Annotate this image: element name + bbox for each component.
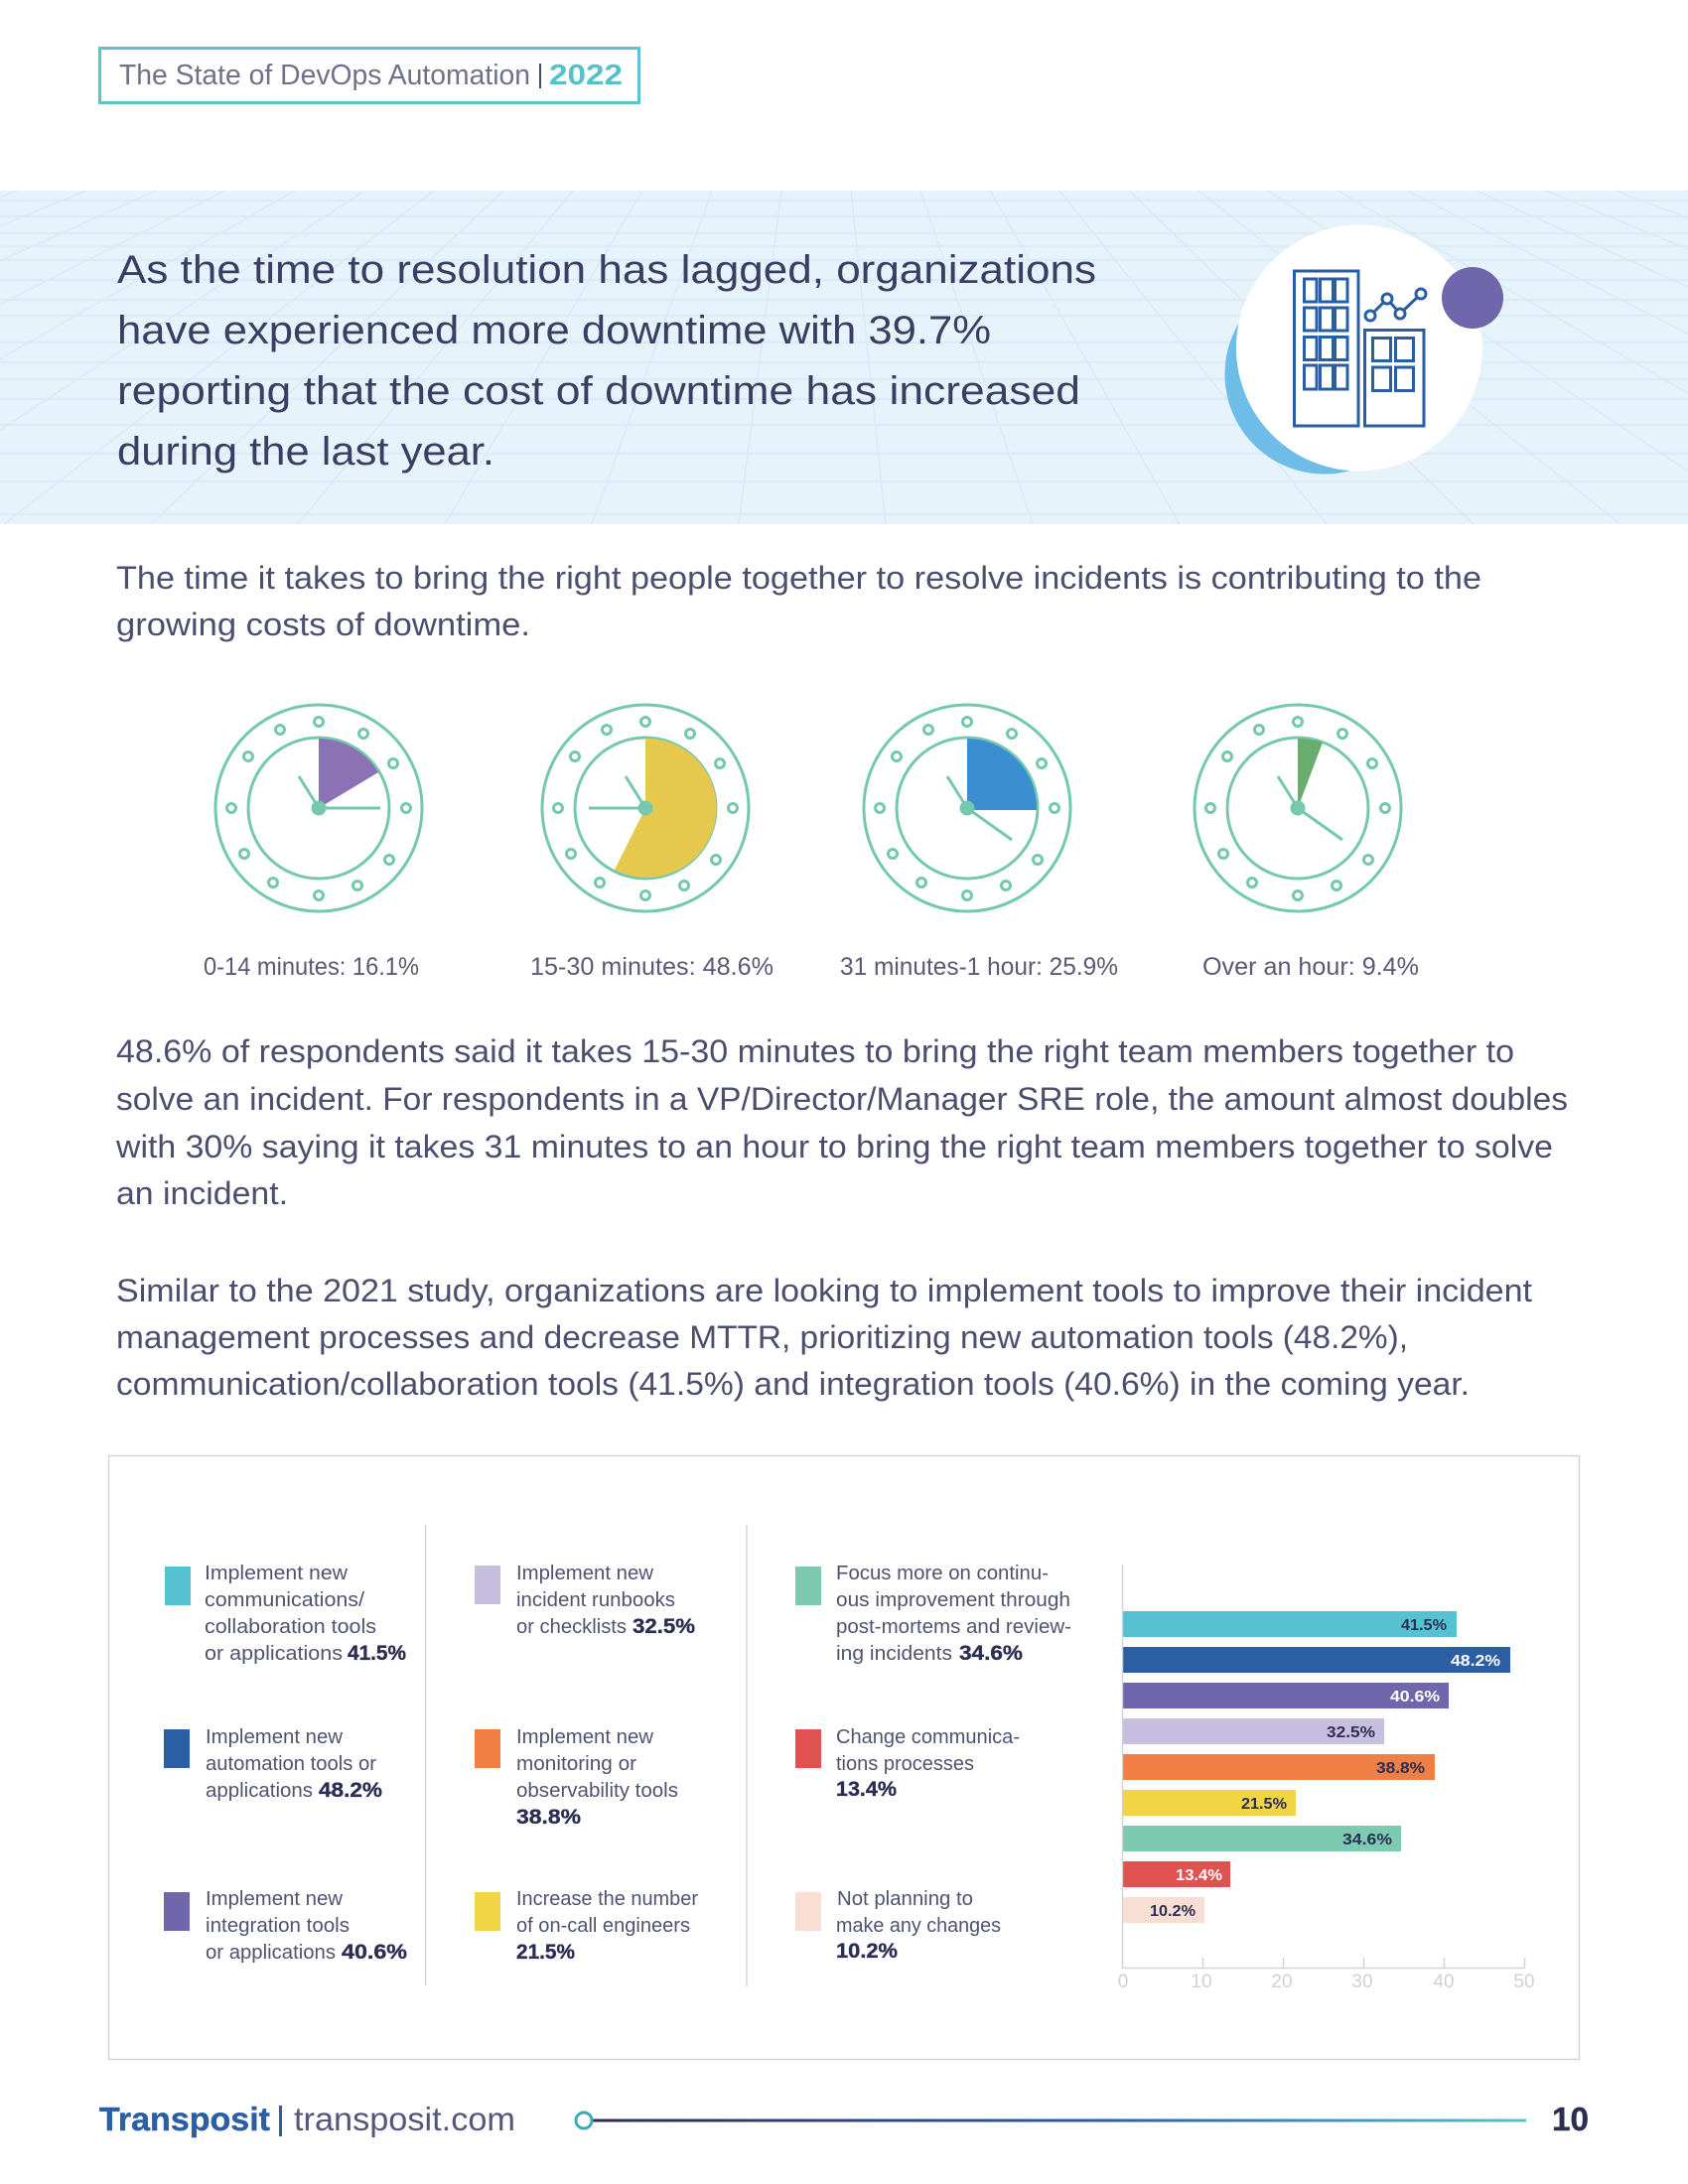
legend: incident runbooks: Implement new <box>516 1563 654 1584</box>
bar chart: 10 <box>1191 1972 1212 1992</box>
intro paragraph <box>116 560 1481 642</box>
clock label: 15-30 minutes: 15-30 minutes: 48.6% <box>530 953 774 981</box>
page number: 10 <box>1552 2101 1589 2137</box>
paragraph: team members statistic: an incident. <box>116 1175 288 1211</box>
header tag: report title: 2022 <box>549 60 623 91</box>
legend: automation tools: applications <box>206 1780 313 1802</box>
bar chart: 0 <box>1118 1972 1128 1992</box>
legend: incident runbooks: incident runbooks <box>516 1589 675 1611</box>
icon: office buildings with trend line <box>1225 224 1503 475</box>
bar chart: 32.5% <box>1327 1724 1375 1741</box>
bar chart: 40 <box>1433 1972 1455 1992</box>
legend: communications tools: 41.5% <box>348 1642 406 1665</box>
legend: communications processes: Change communica- <box>836 1726 1020 1748</box>
legend: on-call engineers <box>475 1888 698 1964</box>
intro paragraph: The time it takes to bring the right people together to resolve incidents is contributing to the <box>116 560 1481 596</box>
paragraph: 2021 study comparison: Similar to the 2021 study, organizations are looking to implement tools to improve their incident <box>116 1273 1532 1308</box>
legend: continuous improvement <box>795 1563 1071 1665</box>
legend: communications tools: collaboration tools <box>205 1616 376 1638</box>
bar chart: 48.2% <box>1451 1653 1500 1670</box>
legend: monitoring tools <box>475 1726 678 1829</box>
legend: no changes planned: Not planning to <box>837 1888 973 1910</box>
legend: monitoring tools: 38.8% <box>516 1806 581 1829</box>
legend: no changes planned: make any changes <box>836 1915 1001 1937</box>
intro paragraph: growing costs of downtime. <box>116 607 530 642</box>
clock label: 0-14 minutes: 0-14 minutes: 16.1% <box>204 953 419 981</box>
footer: progress line <box>576 2113 1526 2128</box>
legend: no changes planned: 10.2% <box>836 1940 898 1963</box>
headline text <box>117 248 1096 474</box>
legend: on-call engineers: of on-call engineers <box>516 1915 690 1937</box>
paragraph: 2021 study comparison: communication/collaboration tools (41.5%) and integration tools (40.6%) in the coming year. <box>116 1366 1470 1402</box>
legend: continuous improvement: ing incidents <box>836 1643 952 1665</box>
headline text: As the time to resolution has lagged, organizations <box>117 248 1096 292</box>
legend: integration tools: Implement new <box>206 1888 344 1910</box>
bar chart: 50 <box>1513 1972 1535 1992</box>
legend: incident runbooks <box>475 1563 695 1638</box>
headline text: have experienced more downtime with 39.7% <box>117 309 991 352</box>
header tag: report title <box>99 48 639 103</box>
footer: brand and website: transposit.com <box>294 2101 515 2137</box>
legend: integration tools: integration tools <box>206 1915 350 1937</box>
legend: continuous improvement: Focus more on continu- <box>836 1563 1049 1584</box>
legend: integration tools <box>164 1888 407 1964</box>
bar chart: 13.4% <box>1176 1867 1222 1884</box>
legend: automation tools: automation tools or <box>206 1753 376 1775</box>
paragraph: 2021 study comparison: management processes and decrease MTTR, prioritizing new automation tools (48.2%), <box>116 1319 1408 1355</box>
paragraph: team members statistic: 48.6% of respondents said it takes 15-30 minutes to bring the right team members together to <box>116 1033 1514 1069</box>
bar chart: 30 <box>1351 1972 1373 1992</box>
legend: on-call engineers: 21.5% <box>516 1941 575 1964</box>
clock: over an hour 9.4% <box>1195 705 1401 911</box>
legend: communications tools: communications/ <box>205 1589 364 1611</box>
legend: communications tools: Implement new <box>205 1563 349 1584</box>
footer: brand and website: Transposit <box>99 2101 270 2137</box>
legend: communications processes: 13.4% <box>836 1778 897 1801</box>
header tag: report title: The State of DevOps Automation <box>119 60 530 91</box>
clock label: over an hour: Over an hour: 9.4% <box>1202 953 1419 981</box>
legend: integration tools: 40.6% <box>342 1941 407 1964</box>
headline text: during the last year. <box>117 430 494 474</box>
clock: 31 minutes-1 hour 25.9% <box>864 705 1070 911</box>
legend: on-call engineers: Increase the number <box>516 1888 698 1910</box>
legend: communications tools <box>165 1563 406 1665</box>
legend: incident runbooks: or checklists <box>516 1616 627 1638</box>
clock: 15-30 minutes 48.6% <box>542 705 749 911</box>
legend: communications processes: tions processes <box>836 1753 974 1775</box>
paragraph: 2021 study comparison <box>116 1273 1532 1402</box>
legend: communications tools: or applications <box>205 1643 343 1665</box>
bar chart: 40.6% <box>1390 1689 1440 1706</box>
paragraph: team members statistic: with 30% saying it takes 31 minutes to an hour to bring the right team members together to solve <box>115 1129 1553 1164</box>
legend: incident runbooks: 32.5% <box>633 1615 695 1638</box>
legend: continuous improvement: post-mortems and review- <box>836 1616 1071 1638</box>
panel: headline banner <box>0 191 1688 524</box>
panel: planned changes chart <box>109 1455 1579 2059</box>
bar chart: 20 <box>1271 1972 1293 1992</box>
bar chart: 34.6% <box>1342 1832 1392 1848</box>
legend: monitoring tools: monitoring or <box>516 1753 636 1775</box>
legend: automation tools <box>164 1726 382 1802</box>
bar chart <box>1118 1565 1535 1992</box>
clock: 0-14 minutes 16.1% <box>215 705 422 911</box>
bar chart: 21.5% <box>1241 1796 1287 1813</box>
legend: monitoring tools: observability tools <box>516 1780 678 1802</box>
legend: monitoring tools: Implement new <box>516 1726 654 1748</box>
bar chart: 41.5% <box>1401 1617 1447 1634</box>
legend: continuous improvement: ous improvement through <box>836 1589 1070 1611</box>
legend: communications processes <box>795 1726 1020 1801</box>
footer: brand and website <box>99 2101 515 2137</box>
bar chart: 10.2% <box>1150 1903 1196 1920</box>
bar chart: 38.8% <box>1376 1760 1425 1777</box>
legend: automation tools: Implement new <box>206 1726 344 1748</box>
legend: automation tools: 48.2% <box>319 1779 382 1802</box>
legend: no changes planned <box>795 1888 1001 1963</box>
legend: continuous improvement: 34.6% <box>959 1642 1023 1665</box>
clock label: 31 minutes-1 hour: 31 minutes-1 hour: 25.9% <box>840 953 1118 981</box>
headline text: reporting that the cost of downtime has increased <box>117 369 1080 413</box>
paragraph: team members statistic: solve an incident. For respondents in a VP/Director/Manager SRE role, the amount almost doubles <box>116 1081 1568 1117</box>
legend: integration tools: or applications <box>206 1942 336 1964</box>
paragraph: team members statistic <box>115 1033 1568 1211</box>
